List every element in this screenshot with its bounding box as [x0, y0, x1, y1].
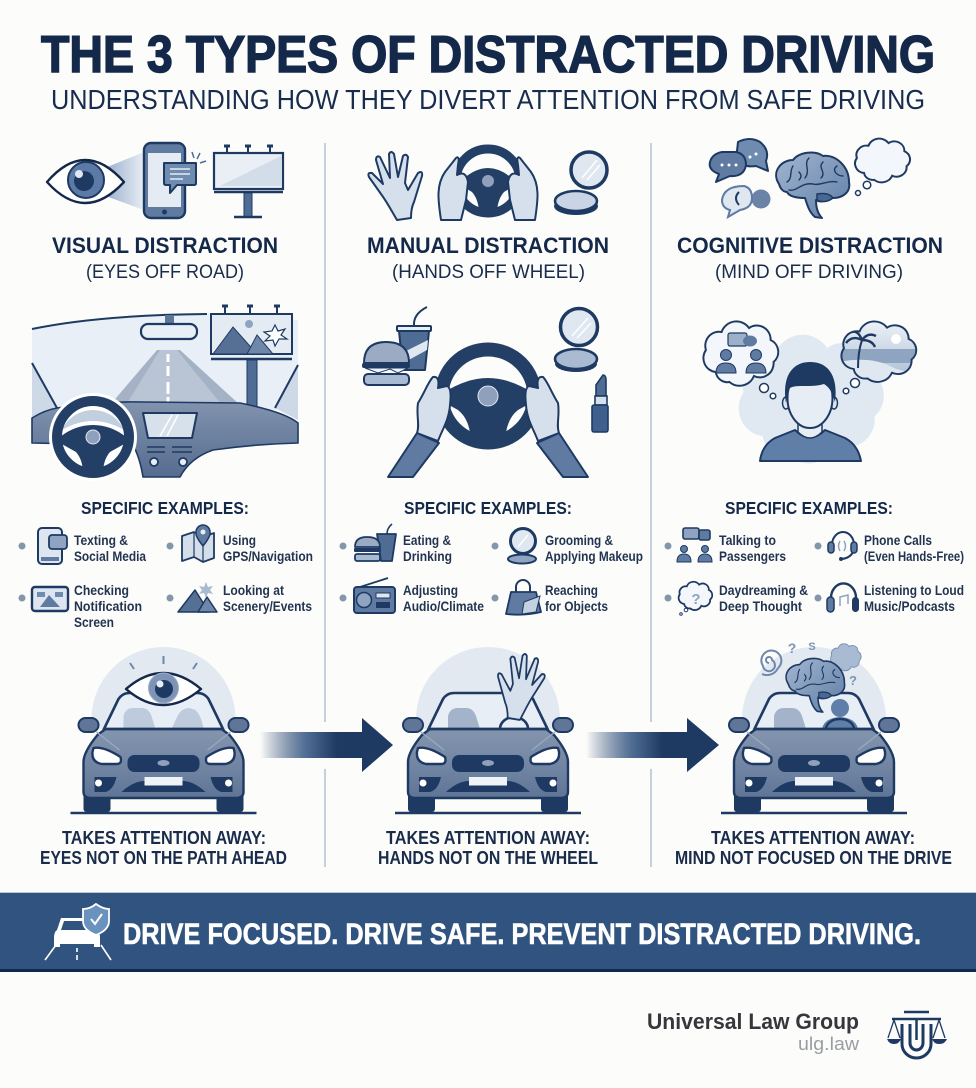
arrow: visual to manual: [260, 718, 393, 772]
heading: manual distraction: MANUAL DISTRACTION: [367, 233, 609, 258]
example: texting and social media: Social Media: [74, 548, 146, 564]
illustration: windshield view with billboard: [32, 306, 298, 481]
example: adjusting audio and climate: Audio/Climate: [403, 598, 484, 614]
heading: visual distraction: VISUAL DISTRACTION: [52, 233, 278, 258]
subheading: hands off wheel: (HANDS OFF WHEEL): [392, 262, 585, 283]
icon: car with shield: [45, 904, 111, 960]
example: talking to passengers: [664, 528, 786, 564]
example: checking notification screen: Checking: [74, 582, 129, 598]
example: reaching for objects: [492, 580, 608, 615]
caption: eyes not on the path ahead: TAKES ATTENTION AWAY:: [62, 827, 266, 848]
caption: hands not on the wheel: HANDS NOT ON THE WHEEL: [378, 847, 598, 868]
example: daydreaming and deep thought: [664, 582, 808, 615]
illustration: car with distracted brain: ?: [849, 673, 857, 688]
example: eating and drinking: Drinking: [403, 548, 452, 564]
illustration: car with eye: [70, 647, 256, 813]
example: checking notification screen: Screen: [74, 614, 114, 630]
icon: hand, steering wheel and compact: [368, 149, 607, 220]
example: looking at scenery: Scenery/Events: [223, 598, 312, 614]
logo: scales and U: [887, 1012, 947, 1058]
heading: specific examples: SPECIFIC EXAMPLES:: [725, 498, 893, 518]
example: texting and social media: [18, 528, 146, 564]
icon: speech bubbles, brain and thought cloud: [710, 139, 910, 218]
banner: [0, 892, 976, 972]
subheading: mind off driving: (MIND OFF DRIVING): [715, 262, 903, 283]
caption: eyes not on the path ahead: [40, 827, 287, 868]
caption: mind not focused on the drive: TAKES ATTENTION AWAY:: [711, 827, 915, 848]
example: reaching for objects: for Objects: [545, 598, 608, 614]
subheading: eyes off road: (EYES OFF ROAD): [86, 262, 244, 283]
illustration: car with raised hand: [395, 647, 581, 813]
arrow: manual to cognitive: [586, 718, 719, 772]
illustration: car with distracted brain: S: [808, 641, 816, 653]
caption: hands not on the wheel: TAKES ATTENTION AWAY:: [386, 827, 590, 848]
list: manual examples: [340, 524, 643, 615]
example: texting and social media: Texting &: [74, 532, 128, 548]
example: talking to passengers: Passengers: [719, 548, 786, 564]
illustration: car with distracted brain: [721, 640, 907, 813]
example: phone calls: Phone Calls: [864, 532, 932, 548]
example: daydreaming and deep thought: ?: [691, 591, 701, 608]
icon: eye, phone and billboard: [47, 143, 283, 218]
example: listening to loud music: Music/Podcasts: [864, 598, 955, 614]
example: checking notification screen: Notification: [74, 598, 142, 614]
example: grooming and applying makeup: Grooming &: [545, 532, 613, 548]
panel: manual distraction: [340, 149, 643, 868]
example: phone calls: [814, 532, 964, 564]
example: grooming and applying makeup: [492, 528, 643, 564]
caption: mind not focused on the drive: [675, 827, 952, 868]
example: using GPS navigation: Using: [223, 532, 256, 548]
illustration: wheel, food and makeup: [362, 307, 608, 477]
list: visual examples: [18, 525, 313, 630]
example: listening to loud music: [814, 582, 964, 614]
example: daydreaming and deep thought: Deep Thought: [719, 598, 802, 614]
heading: specific examples: SPECIFIC EXAMPLES:: [404, 498, 572, 518]
heading: specific examples: SPECIFIC EXAMPLES:: [81, 498, 249, 518]
footer: website: ulg.law: [798, 1034, 860, 1054]
heading: cognitive distraction: COGNITIVE DISTRACTION: [677, 233, 943, 258]
example: reaching for objects: Reaching: [545, 582, 598, 598]
illustration: car with distracted brain: ?: [788, 640, 796, 656]
example: using GPS navigation: [166, 525, 313, 564]
example: eating and drinking: [340, 524, 452, 564]
footer: brand name: Universal Law Group: [647, 1009, 859, 1034]
example: looking at scenery: Looking at: [223, 582, 284, 598]
panel: cognitive distraction: [664, 139, 964, 868]
panel: visual distraction: [18, 143, 313, 868]
example: daydreaming and deep thought: Daydreaming &: [719, 582, 808, 598]
illustration: person daydreaming: [703, 320, 920, 463]
example: looking at scenery: [166, 582, 312, 614]
caption: hands not on the wheel: [378, 827, 598, 868]
example: checking notification screen: [18, 582, 142, 630]
example: using GPS navigation: GPS/Navigation: [223, 548, 313, 564]
example: talking to passengers: Talking to: [719, 532, 776, 548]
example: adjusting audio and climate: [340, 578, 484, 614]
example: eating and drinking: Eating &: [403, 532, 451, 548]
list: cognitive examples: [664, 528, 964, 615]
example: adjusting audio and climate: Adjusting: [403, 582, 458, 598]
example: grooming and applying makeup: Applying Makeup: [545, 548, 643, 564]
caption: eyes not on the path ahead: EYES NOT ON THE PATH AHEAD: [40, 847, 287, 868]
